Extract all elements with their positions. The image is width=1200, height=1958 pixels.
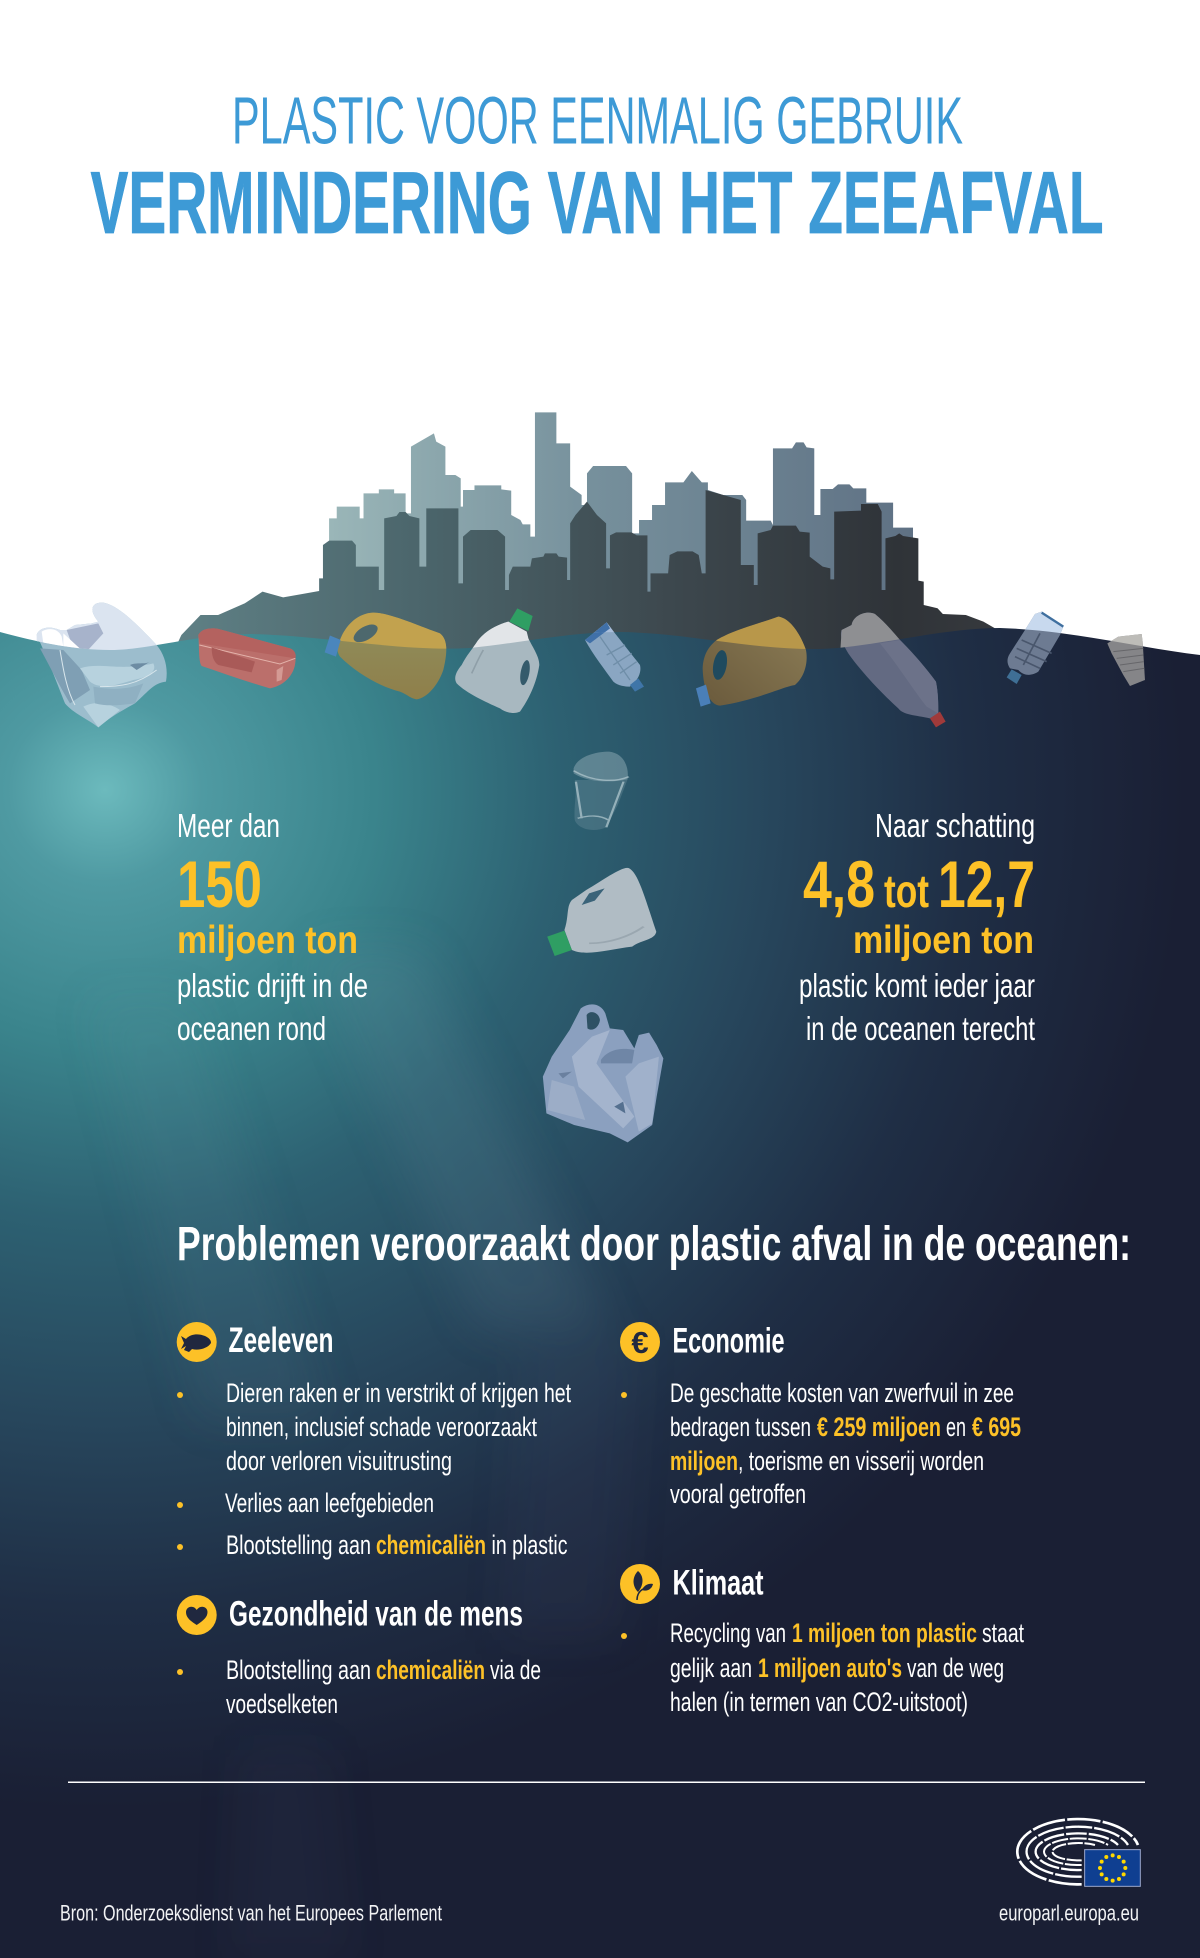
- icon: cup right: [1107, 634, 1145, 686]
- light rays: [90, 950, 640, 1958]
- panel: Klimaat: Recycling van: [670, 1618, 786, 1648]
- panel: Economie: De geschatte kosten van zwerfvuil in zee: [670, 1378, 1014, 1408]
- panel: Zeeleven: in plastic: [492, 1530, 568, 1560]
- panel: Economie: vooral getroffen: [670, 1479, 806, 1509]
- right statistic: 4,8 to 12,7 million tons: [799, 807, 1035, 1047]
- panel: Zeeleven: Verlies aan leefgebieden: [225, 1488, 434, 1518]
- panel: Klimaat: staat: [982, 1618, 1024, 1648]
- icon: bottle right: [1007, 612, 1063, 684]
- icon: grey jug with green cap: [547, 868, 656, 956]
- right statistic: 4,8 to 12,7 million tons: miljoen ton: [853, 919, 1034, 962]
- icon: euro: [620, 1322, 660, 1362]
- panel: Zeeleven: binnen, inclusief schade veroorzaakt: [226, 1412, 537, 1442]
- icon: euro: €: [631, 1325, 649, 1360]
- right statistic: 4,8 to 12,7 million tons: tot: [884, 865, 929, 917]
- skyline island: [178, 412, 996, 657]
- above-water highlights of plastic: [36, 602, 1143, 650]
- panel: Gezondheid van de mens: Gezondheid van de mens: [229, 1594, 523, 1634]
- panel: Economie: en: [946, 1412, 966, 1442]
- icon: plastic bag centre: [543, 1004, 663, 1142]
- panel: Gezondheid van de mens: via de: [490, 1655, 541, 1685]
- panel: Zeeleven: door verloren visuitrusting: [226, 1446, 452, 1476]
- left statistic: 150 million tons: [177, 807, 368, 1047]
- panel: Gezondheid van de mens: chemicaliën: [376, 1655, 485, 1685]
- left statistic: 150 million tons: plastic drijft in de: [177, 967, 368, 1004]
- panel: Zeeleven: [177, 1321, 571, 1560]
- panel: Economie: [620, 1322, 1021, 1509]
- column of plastic: [543, 752, 663, 1142]
- left statistic: 150 million tons: 150: [177, 847, 262, 921]
- left statistic: 150 million tons: oceanen rond: [177, 1010, 326, 1047]
- right statistic: 4,8 to 12,7 million tons: plastic komt ieder jaar: [799, 967, 1035, 1004]
- icon: heart: [177, 1595, 217, 1635]
- panel: Klimaat: 1 miljoen ton plastic: [792, 1618, 977, 1648]
- right statistic: 4,8 to 12,7 million tons: 12,7: [938, 847, 1035, 921]
- icon: fish: [177, 1322, 217, 1362]
- panel: Gezondheid van de mens: voedselketen: [226, 1689, 338, 1719]
- icon: crumpled plastic bag left: [37, 603, 167, 727]
- panel: Economie: bedragen tussen: [670, 1412, 811, 1442]
- panel: Zeeleven: chemicaliën: [376, 1530, 486, 1560]
- icon: clear cup: [574, 752, 629, 830]
- right statistic: 4,8 to 12,7 million tons: Naar schatting: [875, 807, 1035, 844]
- panel: Zeeleven: Dieren raken er in verstrikt of krijgen het: [226, 1378, 571, 1408]
- icon: large clear bottle: [841, 613, 946, 727]
- icon: yellow jug two: [696, 617, 807, 707]
- panel: Klimaat: gelijk aan: [670, 1653, 752, 1683]
- panel: Economie: Economie: [672, 1322, 784, 1360]
- panel: Economie: € 695: [972, 1412, 1021, 1442]
- left statistic: 150 million tons: Meer dan: [177, 807, 280, 844]
- icon: small water bottle: [585, 622, 644, 692]
- ocean background: [0, 628, 1200, 1958]
- panel: Klimaat: Klimaat: [672, 1564, 764, 1602]
- icon: yellow jug one: [325, 613, 446, 699]
- panel: Klimaat: 1 miljoen auto's: [758, 1653, 902, 1683]
- right statistic: 4,8 to 12,7 million tons: 4,8: [803, 847, 875, 921]
- panel: Klimaat: [620, 1564, 1024, 1717]
- left statistic: 150 million tons: miljoen ton: [177, 919, 358, 962]
- panel: Gezondheid van de mens: [177, 1594, 541, 1719]
- European Parliament logo: [1017, 1819, 1140, 1886]
- website: europarl.europa.eu: [999, 1900, 1139, 1926]
- panel: Zeeleven: Blootstelling aan: [226, 1530, 371, 1560]
- icon: leaf: [620, 1564, 660, 1604]
- panel: Gezondheid van de mens: Blootstelling aan: [226, 1655, 371, 1685]
- icon: white jug: [455, 608, 539, 713]
- title: [90, 84, 1104, 252]
- floating plastic row at surface: [37, 603, 1145, 727]
- panel: Klimaat: halen (in termen van CO2-uitstoot): [670, 1687, 968, 1717]
- source note: Bron: Onderzoeksdienst van het Europees Parlement: [60, 1900, 442, 1926]
- panel: Zeeleven: Zeeleven: [228, 1321, 334, 1360]
- right statistic: 4,8 to 12,7 million tons: in de oceanen terecht: [806, 1010, 1035, 1047]
- panel: Economie: € 259 miljoen: [817, 1412, 941, 1442]
- icon: red lunch box: [198, 628, 296, 688]
- panel: Economie: , toerisme en visserij worden: [738, 1446, 984, 1476]
- panel: Klimaat: van de weg: [907, 1653, 1004, 1683]
- panel: Economie: miljoen: [670, 1446, 738, 1476]
